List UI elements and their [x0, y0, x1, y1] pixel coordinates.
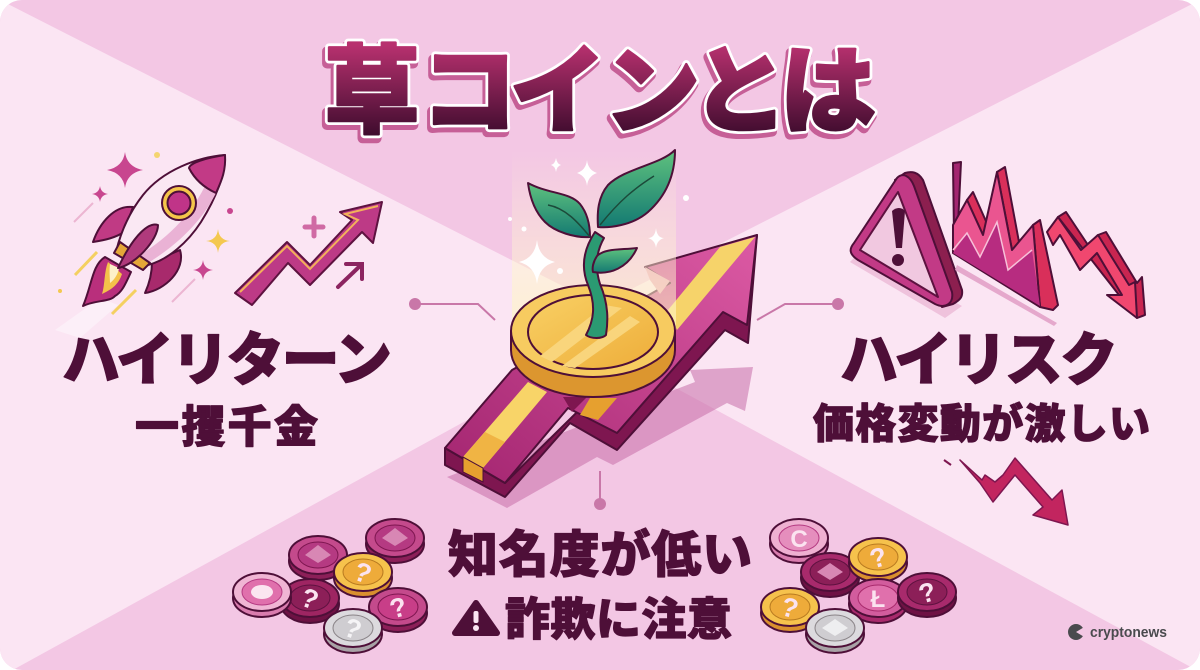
coin: pale pink: C [790, 526, 808, 553]
coins: left pile [233, 519, 427, 653]
title: 草コインとは [324, 39, 876, 146]
sparkles [508, 158, 689, 284]
text: beware of scams: 詐欺に注意 [505, 594, 732, 645]
coin: dark question: ? [915, 576, 939, 610]
coin: magenta ethereum [289, 536, 347, 580]
glow [512, 150, 676, 340]
coin: magenta ethereum top right [366, 519, 424, 563]
plant sprout [528, 150, 675, 338]
central illustration [445, 150, 757, 508]
icon: small falling arrow [944, 458, 1068, 525]
scam warning line [455, 594, 732, 645]
coin: dark question: ? [297, 582, 323, 616]
coin: gold question: ? [866, 541, 890, 575]
icon: rocket [55, 152, 233, 338]
coin: pale pink [233, 573, 291, 617]
icon: rising trend arrow [235, 202, 382, 305]
coin: silver question [324, 609, 382, 653]
coin: gold question left: ? [778, 591, 802, 625]
arrow shadow [447, 367, 753, 508]
big arrow [445, 235, 757, 497]
coin: pink litecoin [849, 579, 907, 623]
icon: volatile jagged chart [953, 162, 1058, 326]
text: get rich quick: 一攫千金 [135, 403, 318, 452]
coin: dark question [898, 573, 956, 617]
coin: gold question [334, 553, 392, 597]
gold coin [511, 285, 675, 397]
icon: warning triangle [850, 172, 962, 318]
connector: bottom [594, 471, 606, 510]
coin: pink question: ? [386, 591, 410, 625]
title: 草コインとは [322, 43, 874, 150]
heading: little known: 知名度が低い [448, 527, 752, 583]
logo: cryptonews: cryptonews [1090, 624, 1167, 641]
heading: high return: ハイリターン [62, 328, 392, 393]
coin: dark ethereum [801, 553, 859, 597]
coin: gold question [849, 538, 907, 582]
heading: high risk: ハイリスク [840, 328, 1118, 393]
coin: pink litecoin: Ł [871, 586, 885, 613]
coin: pale pink [770, 519, 828, 563]
coin: silver question: ? [340, 612, 366, 646]
coin: gold question left [761, 588, 819, 632]
coin: pink question [369, 588, 427, 632]
icon: warning sign [455, 603, 497, 633]
coin: gold question: ? [350, 556, 376, 590]
coin: dark question [281, 579, 339, 623]
coins: right pile [761, 519, 956, 653]
connector: left [409, 298, 495, 320]
text: violent price moves: 価格変動が激しい [813, 401, 1150, 447]
icon: falling red arrow [1047, 212, 1145, 318]
title: 草コインとは [324, 39, 876, 146]
connector: right [757, 298, 844, 320]
coin: silver ethereum [806, 609, 864, 653]
